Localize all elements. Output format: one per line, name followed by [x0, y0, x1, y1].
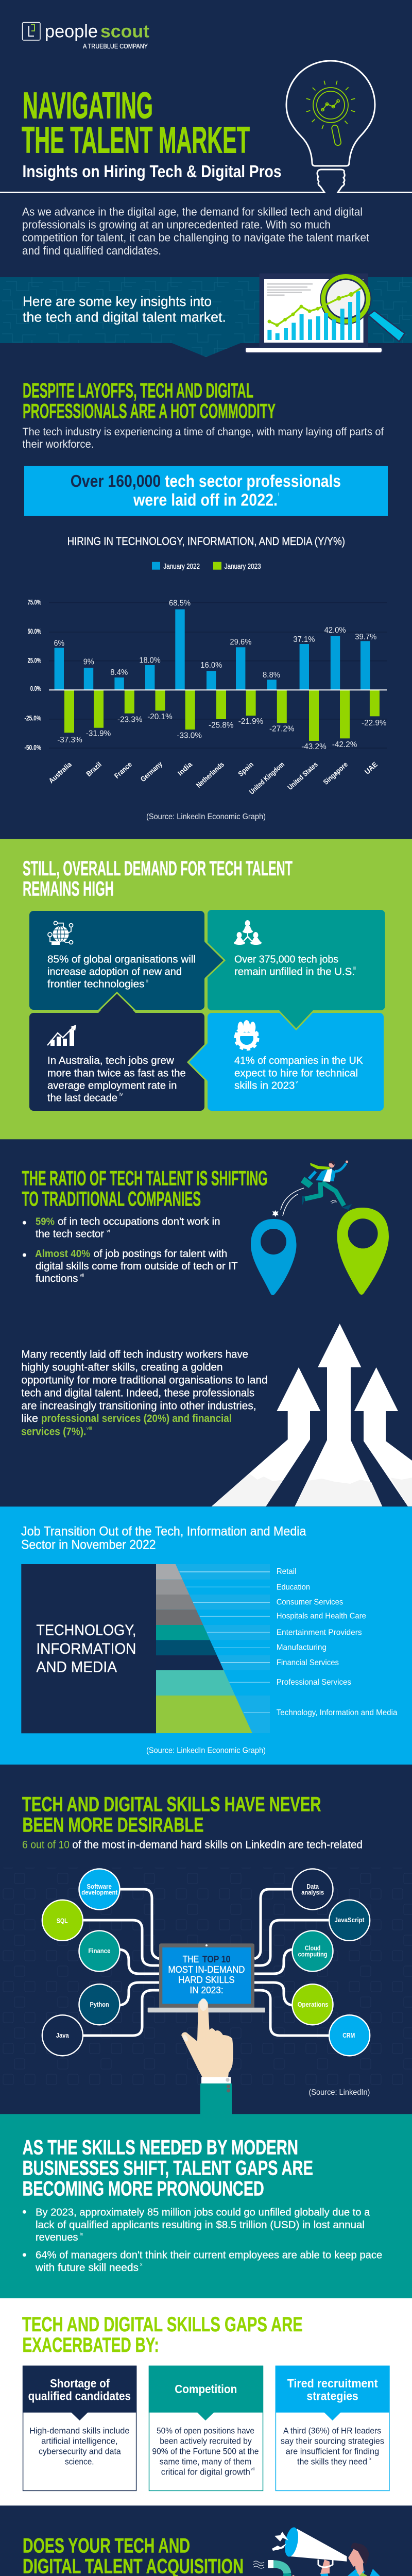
subheading: 6 out of 10	[22, 1839, 70, 1851]
card: competition: 90% of the Fortune 500 at the	[152, 2446, 259, 2456]
icon: blue map pin	[251, 1219, 297, 1295]
card: tired recruitment strategies: Tired recruitment	[287, 2377, 378, 2390]
intro text: competition for talent, it can be challenging to navigate the talent market	[22, 231, 369, 244]
heading	[22, 2313, 303, 2357]
funnel labels: Hospitals and Health Care	[277, 1612, 366, 1621]
bullet list: functions	[36, 1273, 78, 1284]
dark block: technology, information and media: TECHNOLOGY,	[36, 1622, 136, 1639]
funnel labels: Technology, Information and Media	[277, 1708, 397, 1717]
value labels: 39.7%	[355, 633, 376, 641]
text block	[23, 426, 384, 450]
bar chart	[24, 598, 387, 796]
text block: Many recently laid off tech industry workers have	[22, 1349, 248, 1361]
bullet list: ix	[80, 2231, 83, 2236]
card: shortage of qualified candidates: qualified candidates	[28, 2389, 131, 2402]
source: (Source: LinkedIn)	[309, 2088, 370, 2097]
country labels: United States	[286, 760, 319, 791]
funnel labels: Consumer Services	[277, 1598, 343, 1606]
skill: JavaScript: JavaScript	[335, 1916, 365, 1924]
title: NAVIGATING	[23, 85, 153, 126]
funnel labels	[277, 1567, 397, 1717]
panel: layoffs section	[23, 380, 388, 821]
arrow: down pointer	[278, 1010, 314, 1029]
laptop: top 10 skills: MOST IN-DEMAND	[168, 1964, 245, 1975]
funnel labels: Entertainment Providers	[277, 1628, 362, 1637]
country labels: Netherlands	[195, 760, 226, 789]
value labels	[54, 599, 387, 751]
skill: operations: Operations	[298, 2001, 329, 2008]
card: competition	[149, 2366, 263, 2490]
heading: BUSINESSES SHIFT, TALENT GAPS ARE	[23, 2157, 313, 2180]
text block: highly sought-after skills, creating a golden	[22, 1362, 222, 1374]
icon: three people	[234, 920, 262, 945]
card: global organisations: increase adoption of new and	[47, 967, 182, 978]
heading: TECH AND DIGITAL SKILLS GAPS ARE	[22, 2313, 303, 2336]
value labels: -27.2%	[269, 724, 295, 733]
country labels: Germany	[139, 759, 164, 783]
value labels: 6%	[54, 639, 64, 648]
text block: are increasingly transitioning into other industries,	[22, 1400, 256, 1412]
skill: Python: Python	[90, 2001, 109, 2008]
callout: 160,000 laid off: were laid off in 2022.	[133, 490, 278, 510]
bullet list: vi	[107, 1228, 110, 1233]
text block	[21, 1349, 268, 1437]
icon: three upward arrows on roads	[212, 1324, 412, 1506]
skill: SQL	[42, 1900, 83, 1941]
heading: BECOMING MORE PRONOUNCED	[23, 2177, 264, 2200]
chart legend: January 2022	[163, 562, 200, 571]
card: Australia tech jobs	[29, 1013, 204, 1111]
value labels: 37.1%	[293, 635, 315, 644]
skill: Python	[79, 1984, 119, 2025]
card: Australia tech jobs: In Australia, tech jobs grew	[47, 1055, 174, 1066]
value labels: -21.9%	[238, 717, 263, 726]
funnel labels: Financial Services	[277, 1658, 339, 1667]
panel: key insights band	[0, 273, 412, 357]
country labels: India	[176, 760, 194, 777]
bullet list: 59%	[36, 1216, 55, 1228]
card: tired recruitment strategies: strategies	[306, 2389, 358, 2402]
card: Australia tech jobs: the last decade	[47, 1092, 117, 1104]
skill: Java: Java	[56, 2031, 69, 2039]
connectors	[83, 1889, 329, 2036]
axis labels	[24, 598, 41, 751]
logo: PeopleScout: scout	[100, 22, 149, 42]
icon: pointing hand	[181, 1998, 233, 2114]
bullet list: of in tech occupations don't work in	[58, 1216, 220, 1228]
skill: software development: Software	[87, 1883, 112, 1890]
card: competition: 50% of open positions have	[157, 2426, 254, 2435]
value labels: 29.6%	[230, 638, 251, 647]
laptop: top 10 skills: THE	[183, 1954, 199, 1964]
heading	[23, 380, 276, 423]
skill: JavaScript	[329, 1900, 370, 1941]
chart legend	[152, 562, 261, 571]
card: UK companies: 41% of companies in the UK	[234, 1055, 364, 1066]
heading: DESPITE LAYOFFS, TECH AND DIGITAL	[23, 380, 253, 402]
title: THE TALENT MARKET	[22, 120, 250, 161]
logo: PeopleScout	[23, 22, 149, 50]
card: competition: vii	[251, 2467, 255, 2471]
callout: 160,000 laid off: tech sector professionals	[165, 471, 341, 490]
heading: EXACERBATED BY:	[23, 2334, 159, 2357]
card: shortage of qualified candidates: Shortage of	[50, 2377, 110, 2390]
card: competition: same time, many of them	[160, 2456, 251, 2466]
panel: talent gaps section	[0, 2114, 412, 2298]
skill: data analysis: analysis	[301, 1889, 324, 1896]
funnel labels: Retail	[277, 1567, 297, 1576]
value labels: -23.3%	[117, 716, 142, 724]
card: tired recruitment strategies	[276, 2366, 390, 2490]
chart title: HIRING IN TECHNOLOGY, INFORMATION, AND MEDIA (Y/Y%)	[67, 535, 345, 548]
card: global organisations: ii	[146, 978, 148, 984]
card: tired recruitment strategies: x	[369, 2456, 371, 2461]
text block: professional services (20%) and financial	[41, 1413, 232, 1425]
card: Australia tech jobs: iv	[119, 1092, 123, 1097]
intro text: As we advance in the digital age, the demand for skilled tech and digital	[22, 205, 363, 218]
text block: The tech industry is experiencing a time of change, with many laying off parts of	[23, 426, 384, 438]
skill: cloud computing	[293, 1931, 333, 1971]
skill: CRM: CRM	[342, 2031, 355, 2039]
card: competition: been actively recruited by	[160, 2436, 252, 2446]
laptop: top 10 skills	[148, 1943, 265, 2012]
axis labels: 25.0%	[28, 656, 41, 665]
text block: opportunity for more traditional organisations to land	[22, 1375, 268, 1386]
intro text	[22, 205, 369, 257]
heading	[22, 1793, 321, 1836]
icon: green map pin	[337, 1208, 389, 1295]
country labels: Spain	[236, 760, 255, 778]
country labels: Singapore	[321, 760, 349, 786]
card: Australia tech jobs: more than twice as fast as the	[47, 1067, 186, 1079]
laptop: top 10 skills: IN 2023:	[190, 1985, 224, 1995]
subtitle: Insights on Hiring Tech & Digital Pros	[23, 162, 281, 181]
intro text: professionals is growing at an unprecedented rate. With so much	[22, 218, 331, 231]
heading: BEEN MORE DESIRABLE	[23, 1814, 204, 1836]
card: global organisations: 85% of global organisations will	[47, 954, 196, 965]
value labels: -31.9%	[86, 730, 111, 738]
skill: operations	[293, 1984, 333, 2025]
bullet list: digital skills come from outside of tech or IT	[36, 1261, 238, 1272]
skill: software development	[79, 1869, 119, 1909]
chart source: (Source: LinkedIn Economic Graph)	[146, 1746, 266, 1755]
bullet list: 64% of managers don't think their current employees are able to keep pace	[36, 2250, 382, 2261]
band text: the tech and digital talent market.	[23, 309, 226, 325]
value labels: -25.8%	[209, 721, 234, 730]
skill: data analysis	[293, 1869, 333, 1909]
heading: DOES YOUR TECH AND	[23, 2534, 190, 2557]
panel: job transition section	[0, 1506, 412, 1765]
funnel labels: Professional Services	[277, 1678, 351, 1687]
card: unfilled tech jobs: Over 375,000 tech jobs	[234, 954, 338, 965]
text block: viii	[87, 1426, 92, 1431]
bullet list: with future skill needs	[35, 2262, 139, 2274]
heading	[23, 2137, 313, 2200]
heading: Sector in November 2022	[21, 1538, 156, 1552]
card: shortage of qualified candidates: artificial intelligence,	[41, 2436, 118, 2446]
value labels: 68.5%	[169, 599, 191, 608]
laptop: top 10 skills: TOP 10	[202, 1954, 230, 1964]
text block: tech and digital talent. Indeed, these professionals	[22, 1387, 254, 1399]
icon: light bulb with magnifier	[0, 61, 412, 193]
skill: cloud computing: computing	[298, 1951, 328, 1958]
arrow: left pointer	[188, 1043, 208, 1081]
value labels: -22.9%	[362, 719, 386, 727]
skill: cloud computing: Cloud	[305, 1944, 320, 1952]
card: UK companies: v	[296, 1079, 298, 1084]
text block: their workforce.	[23, 438, 94, 450]
skill: CRM	[329, 2015, 370, 2056]
panel: ratio of tech talent section	[21, 1160, 412, 1506]
heading: Job Transition Out of the Tech, Information and Media	[21, 1524, 306, 1539]
green bars: January 2023	[64, 690, 380, 741]
panel: hero	[0, 22, 412, 257]
logo: PeopleScout: people	[45, 22, 98, 42]
value labels: 42.0%	[324, 626, 346, 635]
text block: like	[22, 1413, 38, 1425]
bullet list: By 2023, approximately 85 million jobs could go unfilled globally due to a	[36, 2207, 370, 2218]
funnel labels: Education	[277, 1583, 310, 1591]
card: UK companies	[208, 1013, 384, 1111]
card: competition: Competition	[175, 2382, 237, 2396]
value labels: 8.8%	[263, 671, 280, 680]
card: UK companies: expect to hire for technical	[234, 1067, 358, 1079]
axis labels: 50.0%	[28, 627, 41, 635]
bullet list: revenues	[36, 2232, 78, 2243]
callout: 160,000 laid off	[24, 466, 388, 516]
value labels: 18.0%	[139, 656, 161, 665]
chart legend: January 2023	[225, 562, 261, 571]
axis labels: 75.0%	[28, 598, 41, 606]
axis labels: 0.0%	[30, 684, 41, 692]
card: UK companies: skills in 2023	[234, 1080, 295, 1091]
panel: skills gaps exacerbated section	[0, 2298, 412, 2505]
value labels: -33.0%	[177, 732, 202, 740]
callout: 160,000 laid off: i	[278, 492, 279, 497]
heading	[21, 1524, 306, 1552]
logo: PeopleScout: A TRUEBLUE COMPANY	[83, 42, 148, 50]
country labels: United Kingdom	[247, 760, 286, 796]
country labels	[47, 759, 379, 796]
band text: Here are some key insights into	[23, 294, 212, 309]
subheading: of the most in-demand hard skills on LinkedIn are tech-related	[72, 1839, 363, 1851]
value labels: -43.2%	[301, 742, 327, 751]
icon: people and gear	[235, 1020, 259, 1049]
heading	[23, 857, 293, 901]
funnel chart	[21, 1564, 397, 1733]
panel: desirable skills section	[0, 1793, 412, 2114]
icon: growth chart	[47, 1025, 76, 1046]
dark block: technology, information and media: AND MEDIA	[36, 1659, 117, 1676]
heading	[22, 1167, 268, 1211]
blue bars: January 2022	[55, 609, 370, 690]
icon: laptop with chart and magnifier	[245, 273, 405, 353]
heading: AS THE SKILLS NEEDED BY MODERN	[23, 2137, 298, 2159]
bullet list: Almost 40%	[35, 1248, 90, 1260]
value labels: -20.1%	[147, 713, 173, 721]
skill: finance	[79, 1931, 119, 1971]
icon: globe network	[48, 921, 73, 945]
funnel labels: Manufacturing	[277, 1643, 327, 1652]
icon: jumping businessman	[272, 1160, 351, 1217]
card: unfilled tech jobs: iii	[353, 965, 356, 971]
country labels: Brazil	[84, 760, 103, 778]
card: unfilled tech jobs	[208, 910, 385, 1010]
panel: call to action section	[22, 2526, 412, 2576]
card: Australia tech jobs: average employment rate in	[47, 1080, 177, 1091]
value labels: -37.3%	[57, 736, 82, 744]
laptop: top 10 skills: HARD SKILLS	[178, 1975, 235, 1985]
bullet list: lack of qualified applicants resulting in $8.5 trillion (USD) in lost annual	[36, 2219, 365, 2231]
intro text: and find qualified candidates.	[22, 244, 161, 257]
country labels: Australia	[47, 760, 73, 785]
axis labels: -25.0%	[24, 714, 41, 722]
value labels: 8.4%	[110, 668, 128, 677]
card: shortage of qualified candidates: High-demand skills include	[29, 2426, 129, 2435]
band text	[23, 294, 226, 325]
dark block: technology, information and media	[21, 1564, 156, 1733]
bullet list	[23, 2207, 382, 2274]
bullet list: vii	[80, 1273, 84, 1278]
country labels: UAE	[363, 760, 379, 776]
skill: Java	[42, 2015, 83, 2056]
panel: overall demand section	[0, 839, 412, 1139]
card: competition: critical for digital growth	[161, 2467, 250, 2477]
skill: finance: Finance	[88, 1947, 110, 1955]
bullet list: the tech sector	[36, 1229, 104, 1240]
text block: services (7%).	[21, 1426, 86, 1437]
skill: SQL: SQL	[57, 1917, 68, 1925]
heading: TO TRADITIONAL COMPANIES	[22, 1188, 201, 1211]
skill: software development: development	[81, 1889, 118, 1896]
country labels: France	[113, 760, 133, 780]
value labels: 9%	[83, 658, 94, 667]
card: shortage of qualified candidates: science.	[65, 2456, 94, 2466]
skill: data analysis: Data	[306, 1883, 319, 1890]
card: global organisations: frontier technologies	[47, 979, 145, 990]
arrow: right pointer	[204, 941, 225, 979]
callout: 160,000 laid off: Over 160,000	[71, 471, 161, 490]
arrow: up pointer	[98, 993, 135, 1013]
card: tired recruitment strategies: say their sourcing strategies	[281, 2436, 384, 2446]
card: tired recruitment strategies: A third (36%) of HR leaders	[283, 2426, 381, 2435]
card: tired recruitment strategies: the skills they need	[297, 2456, 367, 2466]
bullet list: of job postings for talent with	[94, 1248, 227, 1260]
chart source: (Source: LinkedIn Economic Graph)	[146, 812, 266, 821]
card: shortage of qualified candidates: cybersecurity and data	[39, 2446, 121, 2456]
card: unfilled tech jobs: remain unfilled in the U.S.	[234, 967, 355, 978]
card: global organisations	[29, 911, 204, 1010]
illustration: man with megaphone and magnet	[253, 2526, 412, 2576]
value labels: 16.0%	[200, 661, 222, 670]
value labels: -42.2%	[332, 740, 357, 749]
bullet list: x	[140, 2262, 143, 2267]
dark block: technology, information and media: INFORMATION	[36, 1640, 136, 1657]
card: tired recruitment strategies: are insufficient for finding	[286, 2446, 379, 2456]
card: shortage of qualified candidates	[23, 2366, 136, 2490]
bullet list	[23, 1216, 238, 1284]
heading: REMAINS HIGH	[23, 878, 114, 901]
axis labels: -50.0%	[24, 743, 41, 751]
heading	[23, 2534, 244, 2576]
title	[22, 85, 250, 161]
